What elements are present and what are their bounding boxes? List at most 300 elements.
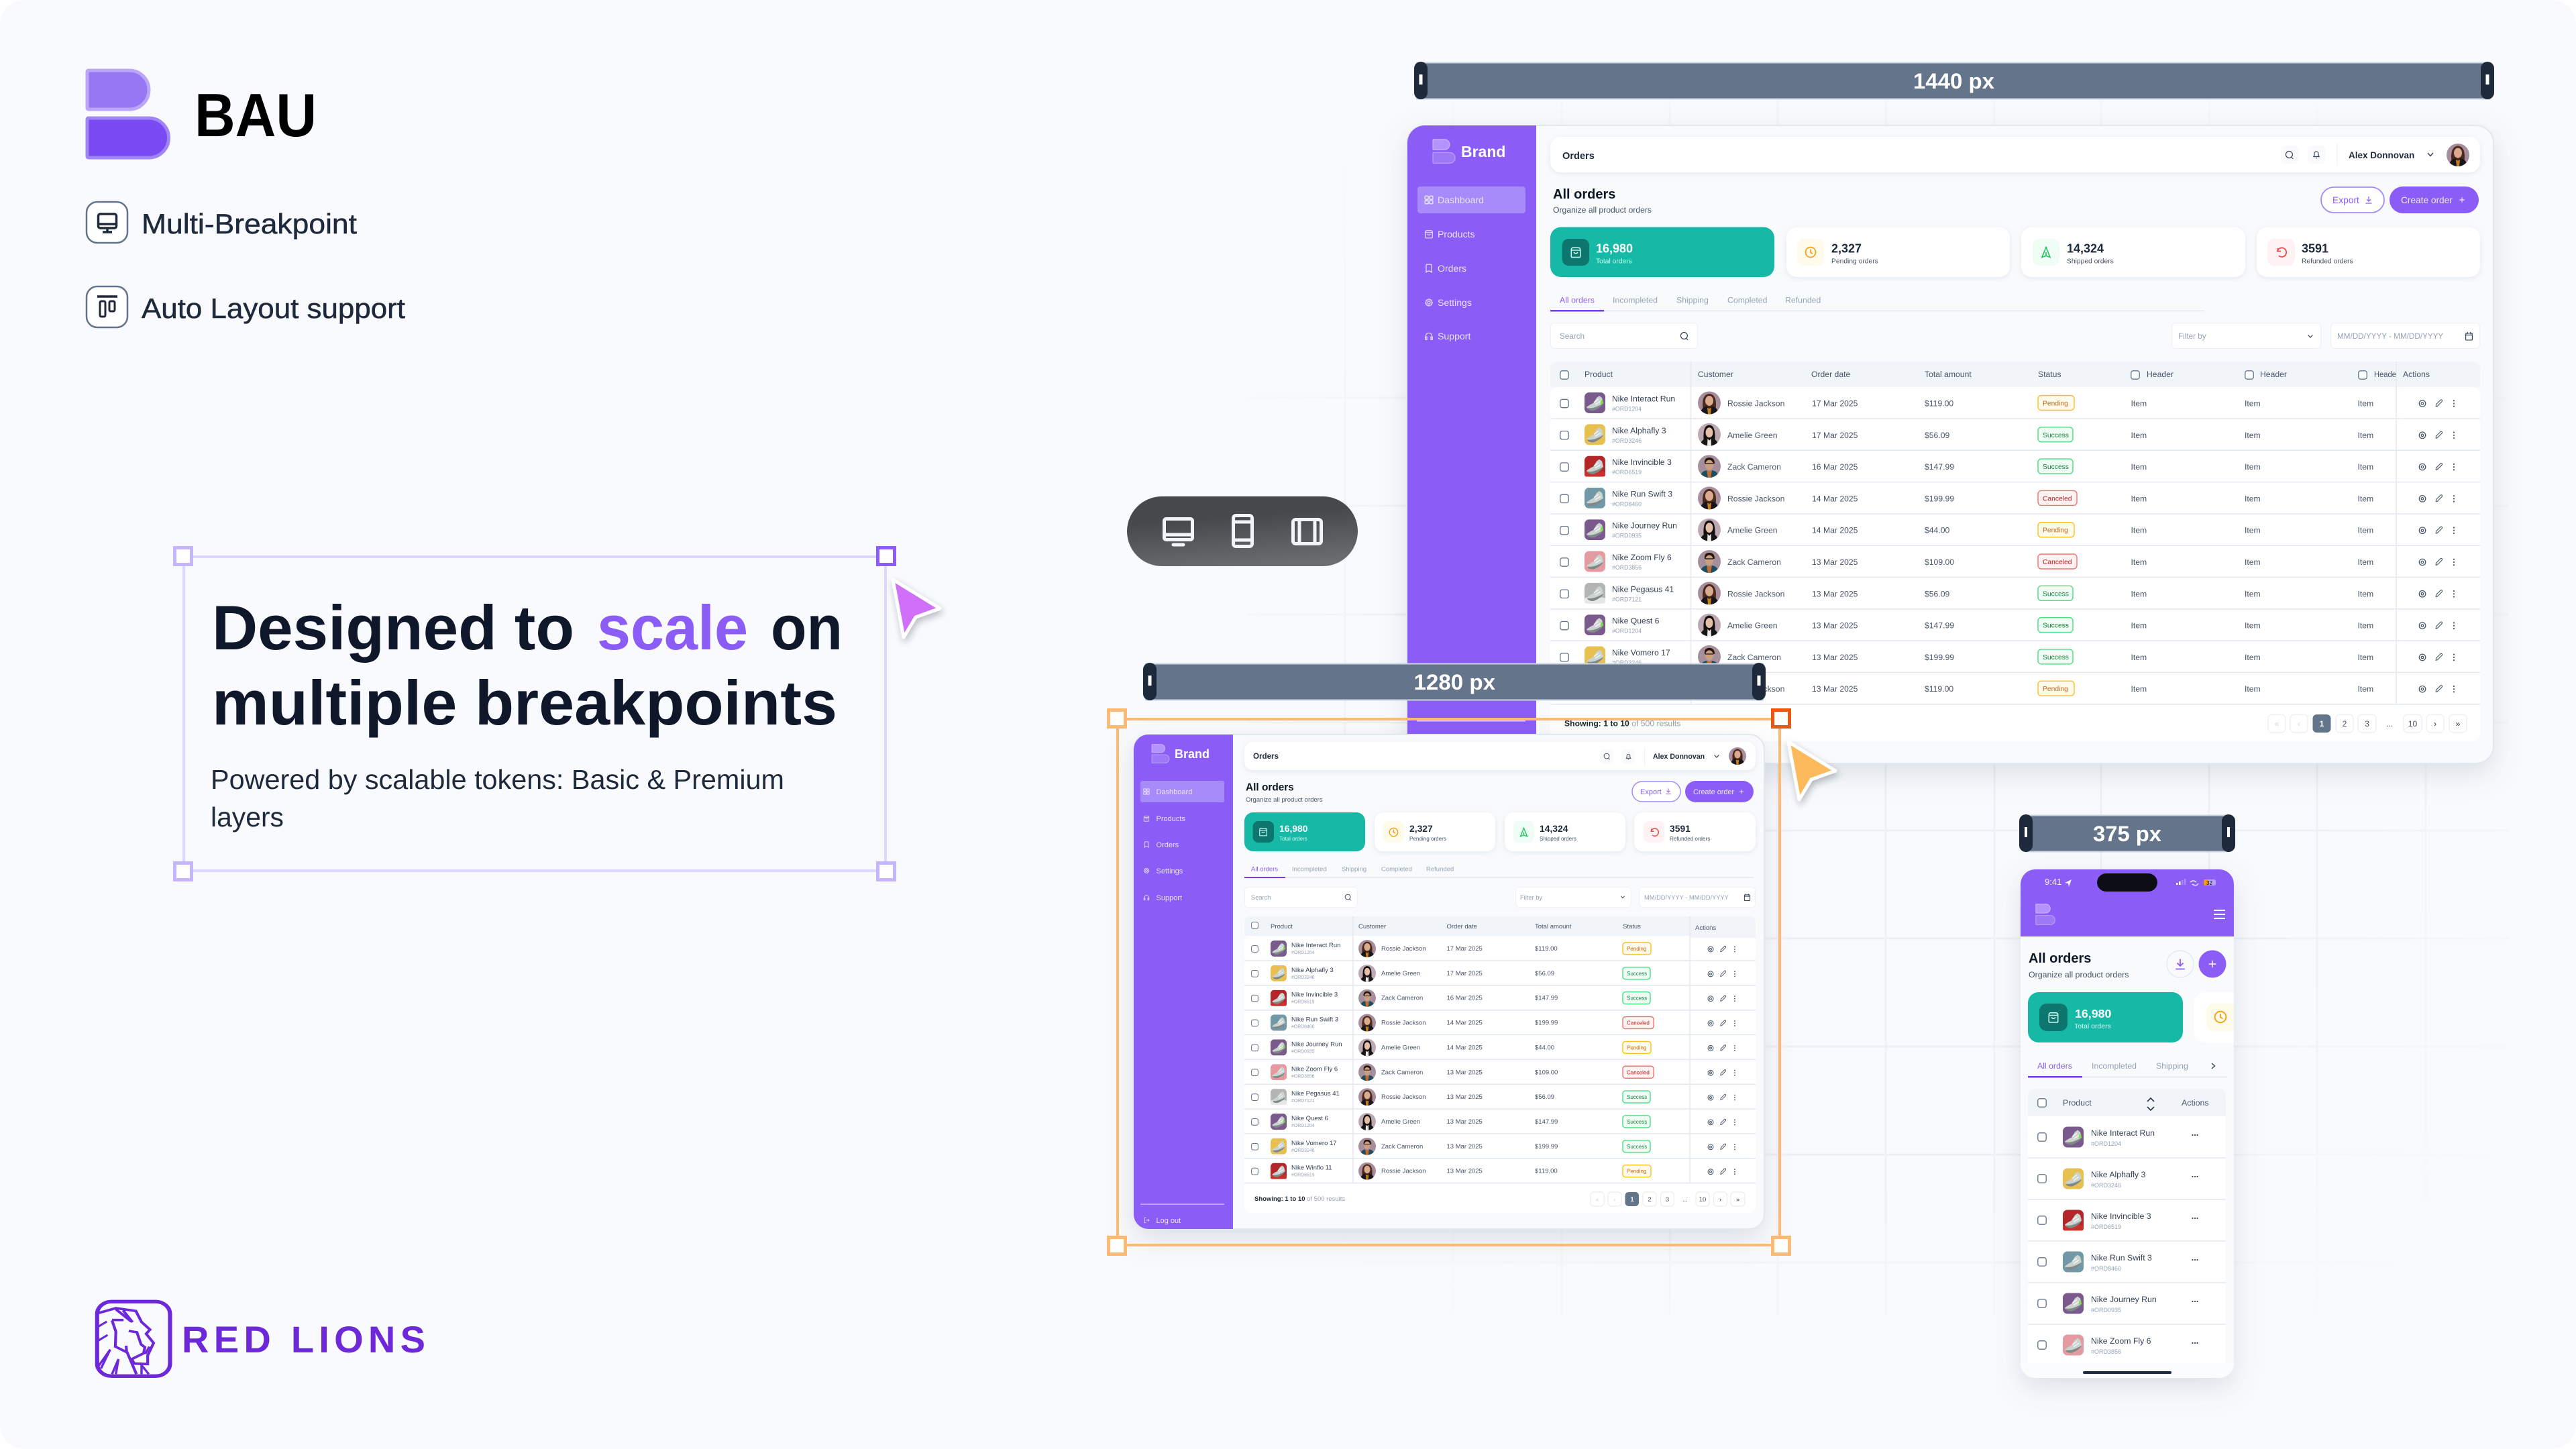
filters: MM/DD/YYYY - MM/DD/YYYY <box>2337 332 2443 341</box>
stat cards <box>1550 227 2480 277</box>
table header: Order date <box>1446 923 1477 930</box>
row: Nike Run Swift 3 <box>2091 1253 2152 1263</box>
mobile header <box>2021 869 2234 936</box>
stat: total orders: 16,980 <box>2075 1007 2111 1020</box>
row: Nike Alphafly 3 <box>2091 1170 2146 1179</box>
nav items: Orders <box>1157 841 1179 849</box>
subtitle: Powered by scalable tokens: Basic & Premium <box>211 764 784 795</box>
row: #ORD0935 <box>1612 533 1642 539</box>
tabs: Incompleted <box>1292 865 1327 873</box>
row: Nike Zoom Fly 6 <box>1612 553 1672 562</box>
row: Success <box>2043 654 2069 661</box>
top bar <box>1550 144 2481 174</box>
table header <box>2028 1089 2226 1116</box>
stat: total orders <box>1550 227 1774 277</box>
row: Nike Winflo 11 <box>1291 1165 1332 1172</box>
heading: scale <box>597 592 748 663</box>
row: Item <box>2357 621 2373 631</box>
buttons <box>1632 781 1754 802</box>
row: #ORD3246 <box>1612 437 1642 444</box>
stat: shipped orders: Shipped orders <box>2067 258 2114 266</box>
tabs <box>1550 295 2204 311</box>
row: Item <box>2245 557 2261 567</box>
tabs: Refunded <box>1426 865 1454 873</box>
feature: Auto Layout support: Auto Layout support <box>142 292 405 324</box>
row: 13 Mar 2025 <box>1812 684 1858 694</box>
row: #ORD6519 <box>1291 1173 1315 1178</box>
filters <box>1551 323 2479 349</box>
selection frame with headline <box>174 547 895 880</box>
row: #ORD3246 <box>1291 1148 1315 1153</box>
row: Item <box>2357 526 2373 535</box>
row: Success <box>2043 590 2069 598</box>
table footer: Showing: 1 to 10 of 500 results <box>1564 719 1680 729</box>
tabs: Shipping <box>1342 865 1366 873</box>
row: Item <box>2131 621 2147 631</box>
row: $119.00 <box>1925 684 1953 694</box>
row: Nike Interact Run <box>1612 394 1675 404</box>
row: #ORD3856 <box>1612 564 1642 571</box>
table header <box>1244 916 1756 1183</box>
table header: Header <box>2147 370 2174 379</box>
tabs: Incompleted <box>2092 1061 2137 1071</box>
row: $147.99 <box>1925 462 1954 472</box>
table footer: › <box>2434 719 2436 729</box>
tabs: Incompleted <box>1613 295 1658 305</box>
subtitle <box>211 764 784 833</box>
row: Rossie Jackson <box>1727 398 1784 408</box>
row <box>1550 677 2480 704</box>
table footer: 10 <box>2408 719 2417 729</box>
row: Nike Journey Run <box>2091 1295 2157 1304</box>
row: Zack Cameron <box>1727 462 1781 472</box>
table header: Order date <box>1811 370 1850 379</box>
row: Amelie Green <box>1727 526 1778 535</box>
row: Nike Quest 6 <box>1291 1115 1328 1122</box>
breakpoint bar: 1280 px <box>1143 663 1766 700</box>
brand: Brand <box>1175 747 1210 761</box>
row: Nike Alphafly 3 <box>1291 967 1334 974</box>
row: $199.99 <box>1925 653 1954 662</box>
row: ... <box>2192 1252 2198 1263</box>
heading <box>212 592 843 738</box>
row: #ORD1204 <box>1612 405 1642 412</box>
stat: pending (clipped) <box>2194 992 2261 1042</box>
row: #ORD0935 <box>1291 1049 1315 1054</box>
icon: lion <box>97 1301 170 1376</box>
row: $56.09 <box>1925 431 1949 440</box>
row: 13 Mar 2025 <box>1812 589 1858 598</box>
selection frame: orange <box>1108 710 1790 1254</box>
filters: Search <box>1251 894 1271 901</box>
table footer: 2 <box>2343 719 2347 729</box>
row <box>1244 1038 1756 1059</box>
row: Nike Winflo 11 <box>1612 680 1664 689</box>
row <box>1244 1138 1756 1159</box>
stat: shipped orders: 14,324 <box>2067 241 2104 255</box>
row: 17 Mar 2025 <box>1812 431 1858 440</box>
row: Nike Invincible 3 <box>2091 1212 2151 1221</box>
tabs: Completed <box>1381 865 1412 873</box>
row: 17 Mar 2025 <box>1446 970 1483 977</box>
row: ... <box>2192 1294 2198 1304</box>
row: Nike Journey Run <box>1291 1040 1342 1048</box>
row <box>2038 1335 2198 1355</box>
nav items: Log out <box>1157 1217 1181 1225</box>
sidebar <box>1407 125 1536 763</box>
row <box>1244 940 1756 961</box>
row: Amelie Green <box>1727 621 1778 631</box>
nav items: Support <box>1157 894 1182 902</box>
stat: shipped orders <box>2021 237 2246 279</box>
row: $119.00 <box>1535 945 1558 953</box>
row: #ORD3246 <box>1291 975 1315 980</box>
row: Pending <box>2043 400 2068 408</box>
mobile 375px <box>2021 869 2261 1378</box>
stat: refunded orders: Refunded orders <box>1670 836 1710 842</box>
row <box>1244 1063 1756 1084</box>
icon: mobile <box>1233 515 1252 546</box>
row: Zack Cameron <box>1381 1143 1423 1150</box>
breakpoint bar: 1440 px: 1440 px <box>1913 69 1994 93</box>
row <box>1550 550 2480 577</box>
row: ... <box>2192 1128 2198 1138</box>
row <box>1550 614 2480 641</box>
row: Item <box>2245 621 2261 631</box>
heading: multiple breakpoints <box>212 667 837 738</box>
row: $109.00 <box>1925 557 1954 567</box>
row: #ORD1204 <box>1291 951 1315 955</box>
cursor: purple arrow <box>893 580 940 637</box>
row: Item <box>2357 653 2373 662</box>
tabs: Completed <box>1727 295 1768 305</box>
row: Item <box>2245 684 2261 694</box>
logo: Red Lions: RED LIONS <box>182 1318 425 1360</box>
row: #ORD3856 <box>1291 1074 1315 1079</box>
row: Nike Invincible 3 <box>1612 458 1672 467</box>
row: Rossie Jackson <box>1381 1168 1426 1175</box>
row: Nike Alphafly 3 <box>1612 426 1666 435</box>
row: $199.99 <box>1535 1020 1558 1027</box>
tabs: All orders <box>1251 865 1278 873</box>
row: Canceled <box>1627 1069 1650 1075</box>
row <box>1550 392 2480 419</box>
table footer: 1 <box>2320 719 2324 729</box>
row <box>1550 486 2480 514</box>
row: Pending <box>1627 1044 1646 1051</box>
row: 16 Mar 2025 <box>1446 995 1483 1002</box>
row <box>1550 582 2480 609</box>
row: Canceled <box>2043 495 2072 502</box>
row: Item <box>2131 526 2147 535</box>
row: #ORD6519 <box>1612 469 1642 476</box>
top bar <box>1244 742 1756 770</box>
nav items: Settings <box>1438 297 1472 308</box>
stat: refunded orders: 3591 <box>2302 241 2328 255</box>
table header: Product <box>2063 1098 2092 1108</box>
row: Rossie Jackson <box>1727 494 1784 503</box>
row <box>1244 989 1756 1010</box>
heading: Designed to <box>212 592 574 663</box>
tabs <box>2028 1061 2227 1077</box>
subtitle: layers <box>211 802 284 833</box>
row: Item <box>2245 589 2261 598</box>
page heading: Organize all product orders <box>1246 796 1323 804</box>
table footer: ... <box>1682 1196 1688 1203</box>
row: 13 Mar 2025 <box>1446 1118 1483 1126</box>
page heading: Organize all product orders <box>1553 205 1652 215</box>
breakpoint bar: 375 px: 375 px <box>2093 822 2161 846</box>
brand logo: BAU <box>87 70 317 158</box>
row: Rossie Jackson <box>1727 589 1784 598</box>
row: Success <box>2043 432 2069 439</box>
stat: pending orders: Pending orders <box>1409 836 1446 842</box>
row: Rossie Jackson <box>1381 1093 1426 1101</box>
row: $147.99 <box>1925 621 1954 631</box>
table footer: ... <box>2386 719 2393 729</box>
row <box>1244 1163 1756 1183</box>
stat: shipped orders: 14,324 <box>1540 823 1568 834</box>
row: 14 Mar 2025 <box>1812 494 1858 503</box>
heading: on <box>771 592 843 663</box>
table footer: » <box>2456 719 2461 729</box>
table footer <box>1254 1192 1745 1206</box>
row: 13 Mar 2025 <box>1446 1143 1483 1150</box>
buttons: Create order <box>2401 195 2453 205</box>
tabs: Refunded <box>1785 295 1821 305</box>
nav items: Orders <box>1438 263 1466 274</box>
table header: Total amount <box>1925 370 1972 379</box>
row: #ORD3856 <box>2091 1348 2121 1355</box>
row <box>1244 1088 1756 1109</box>
feature: Multi-Breakpoint: Multi-Breakpoint <box>142 208 357 239</box>
row <box>1550 455 2480 482</box>
page heading: All orders <box>1553 187 1615 202</box>
row <box>2028 1210 2226 1241</box>
row: 14 Mar 2025 <box>1446 1020 1483 1027</box>
tabs: Shipping <box>1676 295 1709 305</box>
nav items <box>1417 186 1525 341</box>
row: $56.09 <box>1535 970 1554 977</box>
row: #ORD3246 <box>1612 659 1642 666</box>
table footer: ‹ <box>2298 719 2300 729</box>
page heading: All orders <box>1246 782 1294 793</box>
row: Item <box>2245 494 2261 503</box>
stat cards <box>1244 812 1756 851</box>
nav items: Products <box>1157 815 1185 823</box>
row: Nike Pegasus 41 <box>1612 584 1674 594</box>
row <box>2028 1169 2226 1199</box>
stat: total orders <box>1244 812 1365 851</box>
brand logo: BAU: BAU <box>195 82 317 150</box>
row: Success <box>2043 464 2069 471</box>
breakpoint bar: 1440 px <box>1414 62 2494 99</box>
row <box>2028 1127 2226 1158</box>
row: 13 Mar 2025 <box>1446 1093 1483 1101</box>
table footer: ‹ <box>1613 1196 1616 1203</box>
row: Item <box>2131 431 2147 440</box>
stat: refunded orders <box>1634 812 1756 851</box>
row: Amelie Green <box>1727 431 1778 440</box>
row: Item <box>2357 431 2373 440</box>
table footer: 3 <box>2365 719 2369 729</box>
stat: refunded orders <box>2256 237 2481 279</box>
top bar: Orders <box>1253 752 1279 761</box>
row: Item <box>2245 431 2261 440</box>
row: 17 Mar 2025 <box>1812 398 1858 408</box>
nav items: Products <box>1438 229 1475 239</box>
row: Item <box>2131 557 2147 567</box>
page heading: Organize all product orders <box>2029 970 2129 979</box>
row: #ORD8460 <box>2091 1265 2121 1272</box>
row: Zack Cameron <box>1381 1069 1423 1076</box>
table footer: 10 <box>1699 1196 1706 1203</box>
row: $119.00 <box>1535 1168 1558 1175</box>
top bar: Alex Donnovan <box>2349 150 2414 160</box>
row: Zack Cameron <box>1727 653 1781 662</box>
tabs <box>1244 865 1754 878</box>
row: Nike Zoom Fly 6 <box>2091 1336 2151 1346</box>
stat: refunded orders: 3591 <box>1670 823 1690 834</box>
row: $44.00 <box>1535 1044 1554 1051</box>
table header: Actions <box>2403 370 2430 379</box>
table header: Customer <box>1358 923 1386 930</box>
filters: MM/DD/YYYY - MM/DD/YYYY <box>1644 894 1729 901</box>
row: $199.99 <box>1925 494 1954 503</box>
row: Item <box>2357 398 2373 408</box>
row: $56.09 <box>1925 589 1949 598</box>
row: #ORD7121 <box>1291 1099 1315 1104</box>
row: 13 Mar 2025 <box>1812 621 1858 631</box>
row: Nike Interact Run <box>2091 1128 2155 1138</box>
nav items <box>1140 781 1224 1225</box>
buttons: Create order <box>1693 788 1735 796</box>
table header: Customer <box>1698 370 1733 379</box>
stat: refunded orders: Refunded orders <box>2302 258 2353 266</box>
toolbar: breakpoint switcher <box>1127 496 1358 566</box>
row: Success <box>1627 1144 1647 1150</box>
row: Nike Run Swift 3 <box>1612 489 1672 498</box>
table footer: » <box>1736 1196 1739 1203</box>
row: Item <box>2131 589 2147 598</box>
row: $147.99 <box>1535 1118 1558 1126</box>
row: Nike Quest 6 <box>1612 616 1660 626</box>
row: #ORD8460 <box>1612 500 1642 507</box>
table header: Heade <box>2374 370 2396 379</box>
row: #ORD8460 <box>1291 1025 1315 1030</box>
orders table <box>1550 362 2480 741</box>
buttons <box>2321 186 2479 213</box>
row: Zack Cameron <box>1381 995 1423 1002</box>
page heading: All orders <box>2029 951 2091 966</box>
icon: auto layout badge <box>87 286 127 327</box>
row: Canceled <box>2043 559 2072 566</box>
dashboard 1280px <box>1134 735 1764 1229</box>
stat: total orders: 16,980 <box>1279 823 1308 834</box>
table header: Product <box>1271 923 1293 930</box>
row: Nike Pegasus 41 <box>1291 1090 1340 1097</box>
table header: Product <box>1585 370 1613 379</box>
row <box>1550 519 2480 545</box>
icon: desktop <box>1164 519 1193 545</box>
row: Item <box>2357 589 2373 598</box>
stat: pending orders: Pending orders <box>1831 258 1878 266</box>
row: $199.99 <box>1535 1143 1558 1150</box>
status bar: 9:41 <box>2045 877 2061 887</box>
row: $56.09 <box>1535 1093 1554 1101</box>
table footer: « <box>2275 719 2279 729</box>
row: Item <box>2131 462 2147 472</box>
row: Item <box>2131 653 2147 662</box>
feature: Auto Layout support <box>87 286 405 327</box>
row <box>1550 423 2480 450</box>
orders table <box>2028 1089 2226 1363</box>
row: 13 Mar 2025 <box>1446 1069 1483 1076</box>
row: $44.00 <box>1925 526 1949 535</box>
status bar: 32 <box>2206 880 2212 886</box>
row: #ORD3246 <box>2091 1182 2121 1189</box>
row: Rossie Jackson <box>1381 1020 1426 1027</box>
orders table <box>1244 916 1756 1213</box>
row: Nike Run Swift 3 <box>1291 1016 1338 1024</box>
row: ... <box>2192 1169 2198 1179</box>
row: $109.00 <box>1535 1069 1558 1076</box>
row: Rossie Jackson <box>1381 945 1426 953</box>
stat: total orders: Total orders <box>1596 258 1632 266</box>
stat: total orders: Total orders <box>2074 1022 2111 1030</box>
row: Amelie Green <box>1381 1044 1420 1051</box>
nav items: Settings <box>1157 867 1183 875</box>
row: #ORD1204 <box>1612 628 1642 635</box>
table footer <box>1564 714 2467 733</box>
row: Success <box>1627 971 1647 977</box>
row <box>2028 1293 2226 1324</box>
row: Item <box>2357 494 2373 503</box>
nav items: Dashboard <box>1438 195 1484 205</box>
row: Nike Interact Run <box>1291 942 1340 949</box>
table footer: › <box>1719 1196 1721 1203</box>
stat: pending orders: 2,327 <box>1409 823 1433 834</box>
stat: total orders <box>2028 992 2183 1042</box>
row: #ORD6519 <box>2091 1224 2121 1230</box>
logo: Red Lions <box>97 1301 425 1376</box>
table footer: 1 <box>1630 1196 1634 1203</box>
row: Item <box>2357 557 2373 567</box>
row <box>1244 965 1756 985</box>
dashboard 1440px <box>1407 125 2493 763</box>
top bar: Orders <box>1562 151 1595 162</box>
row: Success <box>1627 1094 1647 1100</box>
table footer: 3 <box>1666 1196 1669 1203</box>
row: Pending <box>2043 527 2068 535</box>
row: Pending <box>2043 686 2068 693</box>
row: 13 Mar 2025 <box>1446 1168 1483 1175</box>
icon: tablet <box>1293 519 1322 544</box>
sidebar <box>1134 735 1233 1229</box>
row: Item <box>2357 684 2373 694</box>
row: Rossie Jackson <box>1727 684 1784 694</box>
filters: Search <box>1560 332 1585 341</box>
feature: Multi-Breakpoint <box>87 202 357 243</box>
page heading <box>1553 187 1652 215</box>
buttons: Export <box>2332 195 2359 205</box>
brand <box>1433 140 1505 163</box>
tabs: All orders <box>2037 1061 2072 1071</box>
page heading <box>1246 782 1323 804</box>
row: $119.00 <box>1925 398 1953 408</box>
row: Nike Invincible 3 <box>1291 991 1338 999</box>
status bar <box>2045 873 2216 892</box>
